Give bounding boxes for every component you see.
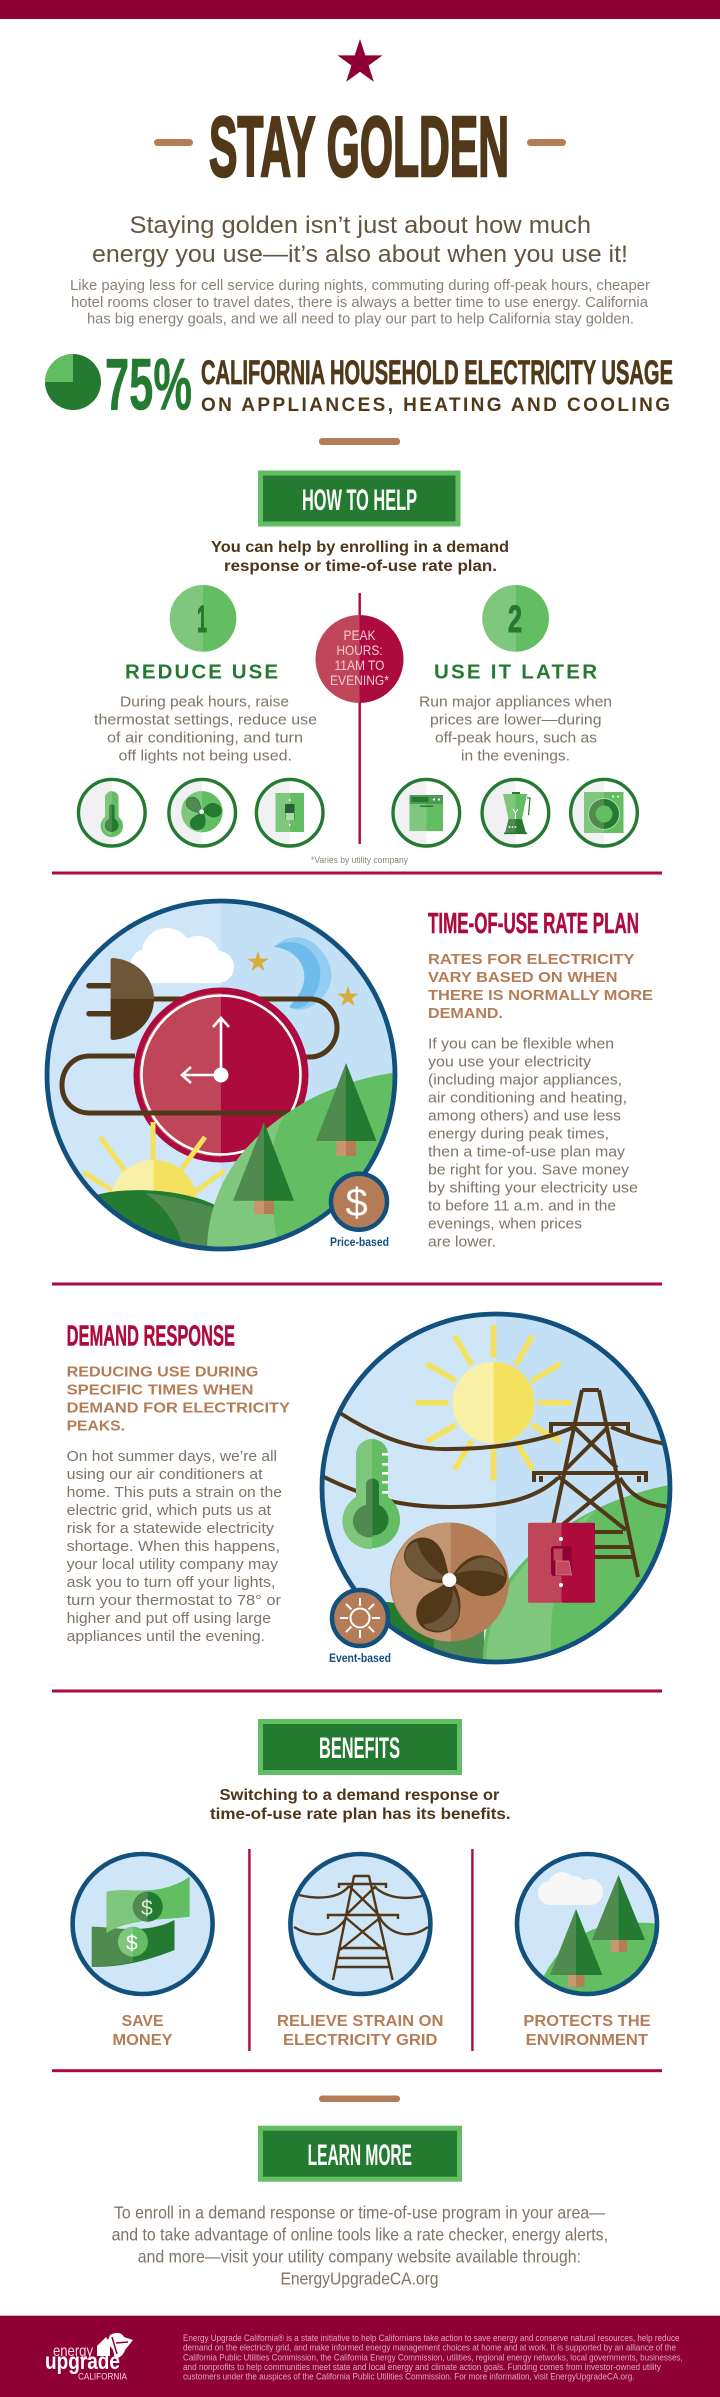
title	[154, 100, 566, 195]
demand response body text: higher and put off using large	[67, 1610, 271, 1627]
relieve strain label	[277, 2013, 444, 2049]
hills	[98, 1073, 393, 1247]
time-of-use subheading: VARY BASED ON WHEN	[428, 969, 618, 986]
demand response body text: turn your thermostat to 78° or	[67, 1592, 281, 1609]
save money label: MONEY	[112, 2032, 173, 2049]
demand response body text: appliances until the evening.	[67, 1628, 265, 1645]
footer disclaimer text: customers under the auspices of the California Public Utilities Commission. For more information, visit EnergyUpgradeCA.org.	[183, 2372, 634, 2382]
time-of-use body text: air conditioning and heating,	[428, 1089, 627, 1106]
how to help intro: response or time-of-use rate plan.	[224, 558, 497, 575]
time-of-use subheading	[428, 951, 653, 1022]
number badge 2: 2	[508, 599, 522, 641]
icon: blender	[482, 779, 549, 846]
footer disclaimer text	[183, 2333, 683, 2382]
demand response body text	[67, 1448, 282, 1645]
time-of-use subheading: DEMAND.	[428, 1005, 503, 1022]
power lines	[322, 1413, 672, 1507]
heading: benefits: BENEFITS	[319, 1732, 400, 1765]
reduce use text: of air conditioning, and turn	[107, 730, 303, 747]
time-of-use body text: are lower.	[428, 1233, 496, 1250]
stars	[247, 951, 359, 1006]
clock	[134, 988, 308, 1162]
demand response body text: On hot summer days, we’re all	[67, 1448, 277, 1465]
reduce use text: off lights not being used.	[118, 748, 292, 765]
time-of-use body text: evenings, when prices	[428, 1215, 582, 1232]
cloud	[130, 928, 234, 983]
relieve strain label: ELECTRICITY GRID	[283, 2032, 438, 2049]
heading: learn more	[260, 2128, 460, 2179]
stat: 75 percent	[45, 344, 673, 426]
icon: money: $	[126, 1932, 138, 1955]
demand response subheading: DEMAND FOR ELECTRICITY	[67, 1400, 290, 1417]
demand response subheading: PEAKS.	[67, 1418, 125, 1435]
event-based badge	[332, 1590, 388, 1646]
event-based label: Event-based	[329, 1651, 391, 1665]
thermometer	[342, 1439, 400, 1549]
intro paragraph: has big energy goals, and we all need to play our part to help California stay golden.	[87, 312, 634, 328]
time-of-use subheading: THERE IS NORMALLY MORE	[428, 987, 653, 1004]
price-based badge: $	[346, 1181, 368, 1225]
icon: washing machine	[571, 779, 637, 846]
time-of-use body text: If you can be flexible when	[428, 1035, 614, 1052]
intro heading	[92, 212, 628, 268]
learn more text: and more—visit your utility company website available through:	[138, 2246, 581, 2266]
time-of-use body text: you use your electricity	[428, 1053, 592, 1070]
peak hours badge: HOURS:	[336, 643, 382, 658]
hills	[380, 1484, 675, 1670]
demand response body text: electric grid, which puts us at	[67, 1502, 272, 1519]
heading: how to help: HOW TO HELP	[302, 484, 417, 517]
energy upgrade california logo: energy	[53, 2343, 93, 2360]
transmission tower	[534, 1390, 646, 1577]
peak hours badge: 11AM TO	[334, 658, 384, 673]
reduce use text: During peak hours, raise	[120, 694, 289, 711]
time-of-use body text: among others) and use less	[428, 1107, 621, 1124]
icon: star	[338, 39, 382, 82]
energy upgrade california logo: CALIFORNIA	[78, 2372, 127, 2382]
learn more text: and to take advantage of online tools like a rate checker, energy alerts,	[112, 2224, 608, 2244]
price-based badge	[331, 1174, 387, 1230]
benefits intro	[210, 1787, 511, 1823]
footer disclaimer text: and nonprofits to help communities meet state and local energy and climate action goals. Funding comes from investor-owned utility	[183, 2362, 661, 2372]
illustration: time-of-use clock scene	[45, 899, 400, 1260]
panel: reduce use	[94, 585, 317, 765]
plug	[89, 958, 154, 1040]
illustration: demand response scene	[320, 1312, 675, 1670]
demand response body text: risk for a statewide electricity	[67, 1520, 275, 1537]
intro heading: energy you use—it’s also about when you use it!	[92, 241, 628, 268]
lower power cord	[62, 1056, 330, 1113]
heading: how to help	[260, 473, 458, 524]
use it later heading: USE IT LATER	[434, 661, 597, 684]
time-of-use body text: to before 11 a.m. and in the	[428, 1197, 616, 1214]
protects environment label	[523, 2013, 651, 2049]
how to help intro: You can help by enrolling in a demand	[211, 539, 509, 556]
demand response body text: ask you to turn off your lights,	[67, 1574, 275, 1591]
learn more text: EnergyUpgradeCA.org	[280, 2268, 438, 2288]
stat caption: ON APPLIANCES, HEATING AND COOLING	[201, 395, 670, 416]
number badge 2	[482, 585, 549, 652]
benefits intro: time-of-use rate plan has its benefits.	[210, 1806, 511, 1823]
benefit: protects environment	[517, 1854, 660, 2049]
tree left	[233, 1122, 294, 1214]
demand response body text: shortage. When this happens,	[67, 1538, 280, 1555]
demand response heading: DEMAND RESPONSE	[67, 1321, 235, 1353]
intro paragraph: Like paying less for cell service during nights, commuting during off-peak hours, cheaper	[70, 278, 650, 294]
icon: trees	[517, 1854, 660, 2000]
reduce use text: thermostat settings, reduce use	[94, 712, 317, 729]
use it later text: in the evenings.	[461, 748, 570, 765]
icon: fan	[169, 779, 236, 846]
tree right	[316, 1063, 376, 1156]
how to help intro	[211, 539, 509, 575]
intro heading: Staying golden isn’t just about how much	[130, 212, 591, 239]
use it later text: off-peak hours, such as	[435, 730, 597, 747]
footnote: *Varies by utility company	[311, 855, 408, 866]
sunrise	[83, 1122, 225, 1203]
pie chart: 75%	[45, 354, 101, 410]
heading: learn more: LEARN MORE	[308, 2139, 412, 2172]
icon: money: $	[141, 1897, 153, 1920]
icon: dishwasher	[393, 779, 460, 846]
time-of-use body text: energy during peak times,	[428, 1125, 609, 1142]
learn more text	[112, 2202, 608, 2288]
demand response body text: home. This puts a strain on the	[67, 1484, 282, 1501]
time-of-use body text: (including major appliances,	[428, 1071, 622, 1088]
price-based label: Price-based	[330, 1235, 389, 1249]
intro paragraph: hotel rooms closer to travel dates, there is always a better time to use energy. California	[71, 295, 649, 311]
panel text: time-of-use rate plan	[428, 908, 653, 1250]
demand response body text: your local utility company may	[67, 1556, 279, 1573]
peak hours badge: PEAK	[344, 628, 376, 643]
panel: use it later	[419, 585, 612, 765]
demand response subheading	[67, 1364, 290, 1435]
icon: thermometer	[78, 779, 145, 846]
use it later text: Run major appliances when	[419, 694, 612, 711]
footer	[0, 2316, 720, 2397]
protects environment label: ENVIRONMENT	[526, 2032, 649, 2049]
demand response subheading: REDUCING USE DURING	[67, 1364, 258, 1381]
peak hours badge: EVENING*	[330, 673, 390, 688]
save money label: SAVE	[122, 2013, 164, 2030]
demand response subheading: SPECIFIC TIMES WHEN	[67, 1382, 253, 1399]
panel text: demand response	[67, 1321, 290, 1645]
icon: light switch	[256, 779, 323, 846]
light switch	[528, 1523, 595, 1603]
learn more text: To enroll in a demand response or time-of-use program in your area—	[114, 2202, 605, 2222]
benefit: save money	[73, 1854, 213, 2049]
stat number: 75%	[105, 344, 192, 426]
time-of-use body text	[428, 1035, 638, 1250]
center divider	[358, 593, 361, 844]
moon	[274, 937, 331, 1010]
benefits intro: Switching to a demand response or	[220, 1787, 500, 1804]
number badge 1: 1	[197, 599, 207, 641]
use it later text: prices are lower—during	[430, 712, 602, 729]
energy upgrade california logo	[45, 2333, 133, 2382]
time-of-use subheading: RATES FOR ELECTRICITY	[428, 951, 634, 968]
benefit: relieve strain	[277, 1854, 444, 2049]
intro paragraph	[70, 278, 650, 328]
sun	[416, 1325, 572, 1481]
use it later text	[419, 694, 612, 765]
footer disclaimer text: demand on the electricity grid, and make informed energy management choices at home and at work. It is supported by an alliance of the	[183, 2343, 676, 2353]
reduce use heading: REDUCE USE	[125, 661, 278, 684]
demand response body text: using our air conditioners at	[67, 1466, 263, 1483]
time-of-use body text: be right for you. Save money	[428, 1161, 630, 1178]
protects environment label: PROTECTS THE	[523, 2013, 651, 2030]
time-of-use body text: by shifting your electricity use	[428, 1179, 638, 1196]
top banner	[0, 0, 720, 19]
fan	[390, 1522, 509, 1642]
icon: transmission tower	[290, 1854, 430, 1994]
icon: money	[73, 1854, 213, 1994]
number badge 1	[170, 585, 236, 652]
peak hours badge	[316, 615, 404, 703]
reduce use text	[94, 694, 317, 765]
save money label	[112, 2013, 173, 2049]
upper power cord	[150, 999, 337, 1057]
time-of-use body text: then a time-of-use plan may	[428, 1143, 626, 1160]
stat caption	[201, 354, 673, 416]
relieve strain label: RELIEVE STRAIN ON	[277, 2013, 444, 2030]
energy upgrade california logo: upgrade	[45, 2348, 120, 2374]
heading: benefits	[260, 1722, 460, 1772]
